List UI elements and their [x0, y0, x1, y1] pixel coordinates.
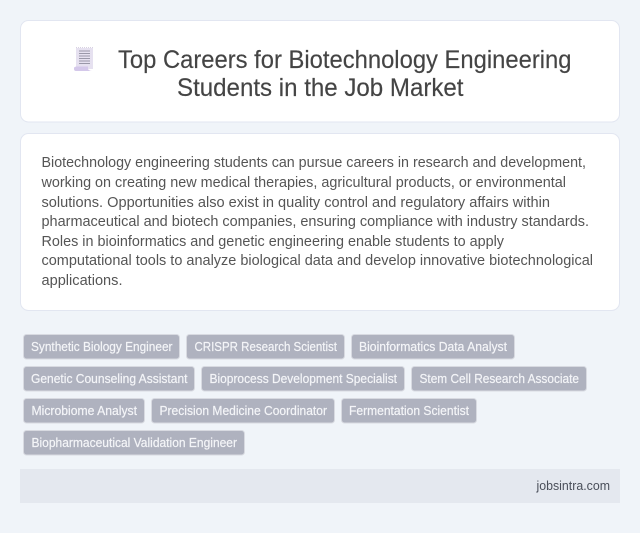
- title: Top Careers for Biotechnology Engineering: [118, 46, 572, 74]
- tag: Fermentation Scientist: Fermentation Scientist: [349, 404, 470, 418]
- tag: Bioinformatics Data Analyst: [352, 334, 514, 359]
- tag: Stem Cell Research Associate: [412, 366, 586, 391]
- tag: Precision Medicine Coordinator: Precision Medicine Coordinator: [160, 404, 327, 418]
- tag: Genetic Counseling Assistant: Genetic Counseling Assistant: [31, 372, 188, 386]
- title: [118, 46, 572, 102]
- tag: Microbiome Analyst: [24, 398, 144, 423]
- tag: Bioprocess Development Specialist: Bioprocess Development Specialist: [210, 372, 397, 386]
- panel: description: [20, 134, 620, 310]
- tag: Microbiome Analyst: Microbiome Analyst: [32, 404, 138, 418]
- tag: Biopharmaceutical Validation Engineer: Biopharmaceutical Validation Engineer: [32, 436, 237, 450]
- tag: Genetic Counseling Assistant: [24, 366, 194, 391]
- text block: description: working on creating new medical therapies, agricultural products, or environmental: [41, 175, 566, 191]
- tag: Synthetic Biology Engineer: Synthetic Biology Engineer: [31, 340, 172, 354]
- tag: Bioprocess Development Specialist: [202, 366, 404, 391]
- tag: Bioinformatics Data Analyst: Bioinformatics Data Analyst: [359, 340, 508, 354]
- panel: header: [20, 20, 620, 122]
- text block: description: Roles in bioinformatics and genetic engineering enable students to apply: [42, 234, 505, 250]
- tag: Precision Medicine Coordinator: [152, 398, 334, 423]
- text block: description: applications.: [42, 273, 122, 289]
- text block: description: solutions. Opportunities also exist in quality control and regulatory affairs within: [42, 195, 550, 211]
- title: Students in the Job Market: [177, 74, 464, 102]
- icon: document scroll: [74, 48, 93, 71]
- text block: description: [41, 155, 593, 289]
- footer source: jobsintra.com: [536, 479, 610, 493]
- tag: Fermentation Scientist: [342, 398, 476, 423]
- text block: description: Biotechnology engineering students can pursue careers in research and development,: [42, 155, 586, 171]
- tag: CRISPR Research Scientist: CRISPR Research Scientist: [194, 340, 337, 354]
- tag: Synthetic Biology Engineer: [24, 334, 180, 359]
- tag: Biopharmaceutical Validation Engineer: [24, 430, 244, 455]
- tag: Stem Cell Research Associate: Stem Cell Research Associate: [420, 372, 579, 386]
- tag list: [24, 334, 586, 455]
- text block: description: computational tools to analyze biological data and develop innovative biotechnological: [42, 253, 593, 269]
- footer: [20, 469, 620, 503]
- tag: CRISPR Research Scientist: [186, 334, 344, 359]
- text block: description: pharmaceutical and biotech companies, ensuring compliance with industry standards.: [42, 214, 589, 230]
